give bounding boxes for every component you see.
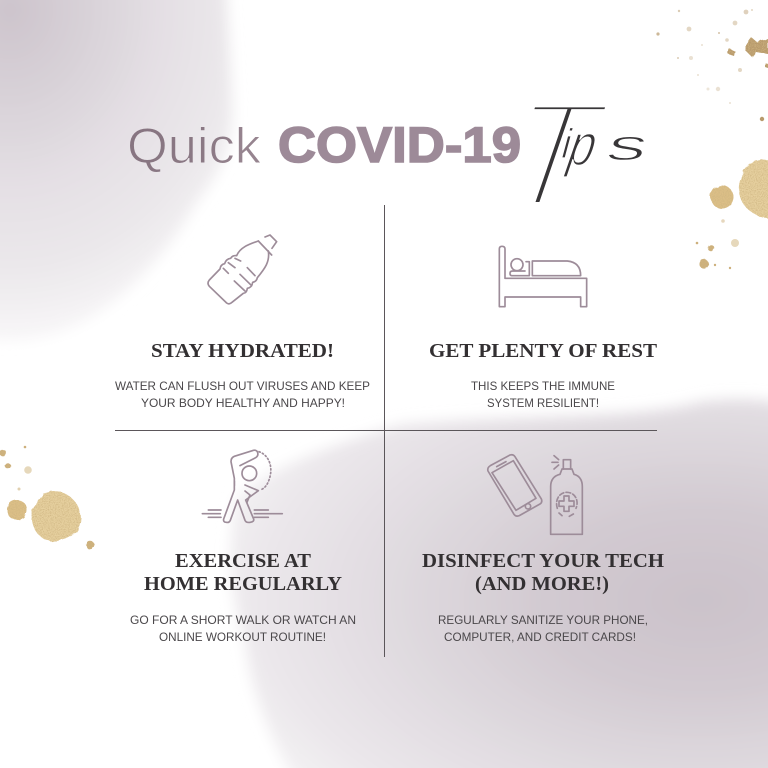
gold blots: right side (696, 160, 768, 269)
text: exercise description (130, 614, 356, 644)
panel: stay hydrated (115, 235, 370, 410)
heading: DISINFECT YOUR TECH (422, 550, 664, 572)
icon: disinfectant spray (551, 456, 582, 534)
icon: bed (499, 246, 587, 307)
text: hydration description: YOUR BODY HEALTHY AND HAPPY! (141, 397, 345, 410)
text: exercise description: GO FOR A SHORT WALK OR WATCH AN (130, 614, 356, 627)
text: rest description (471, 380, 615, 410)
watercolor wash: bottom right (231, 399, 768, 768)
gold dust: top right (656, 9, 768, 121)
heading: HOME REGULARLY (144, 573, 342, 595)
text: hydration description: WATER CAN FLUSH OUT VIRUSES AND KEEP (115, 380, 370, 393)
text: rest description: THIS KEEPS THE IMMUNE (471, 380, 615, 393)
title: script Tips: p (560, 111, 608, 178)
text: exercise description: ONLINE WORKOUT ROUTINE! (159, 631, 326, 644)
heading (144, 550, 342, 595)
heading: EXERCISE AT (175, 550, 311, 572)
gold blots: left side (0, 446, 94, 549)
text: disinfect description: COMPUTER, AND CREDIT CARDS! (444, 631, 636, 644)
watercolor wash: top left (0, 0, 232, 341)
heading: (AND MORE!) (475, 573, 609, 595)
heading: GET PLENTY OF REST (429, 340, 657, 362)
title (127, 70, 655, 239)
dividers (115, 205, 657, 657)
panel: disinfect your tech (422, 455, 664, 644)
text: disinfect description: REGULARLY SANITIZE YOUR PHONE, (438, 614, 648, 627)
title: COVID-19: COVID-19 (278, 117, 521, 173)
heading: STAY HYDRATED! (151, 340, 334, 362)
panel: exercise at home (130, 450, 356, 644)
title: script Tips: T (482, 70, 626, 239)
panel: get plenty of rest (429, 246, 657, 410)
heading (422, 550, 664, 595)
text: hydration description (115, 380, 370, 410)
icon: phone (488, 455, 542, 516)
text: disinfect description (438, 614, 648, 644)
title: Quick: Quick (127, 118, 262, 174)
title: script Tips: i (557, 120, 578, 167)
icon: water bottle (208, 235, 277, 304)
text: rest description: SYSTEM RESILIENT! (487, 397, 599, 410)
icon: stretching figure (202, 450, 282, 522)
title: script Tips: s (601, 120, 655, 169)
